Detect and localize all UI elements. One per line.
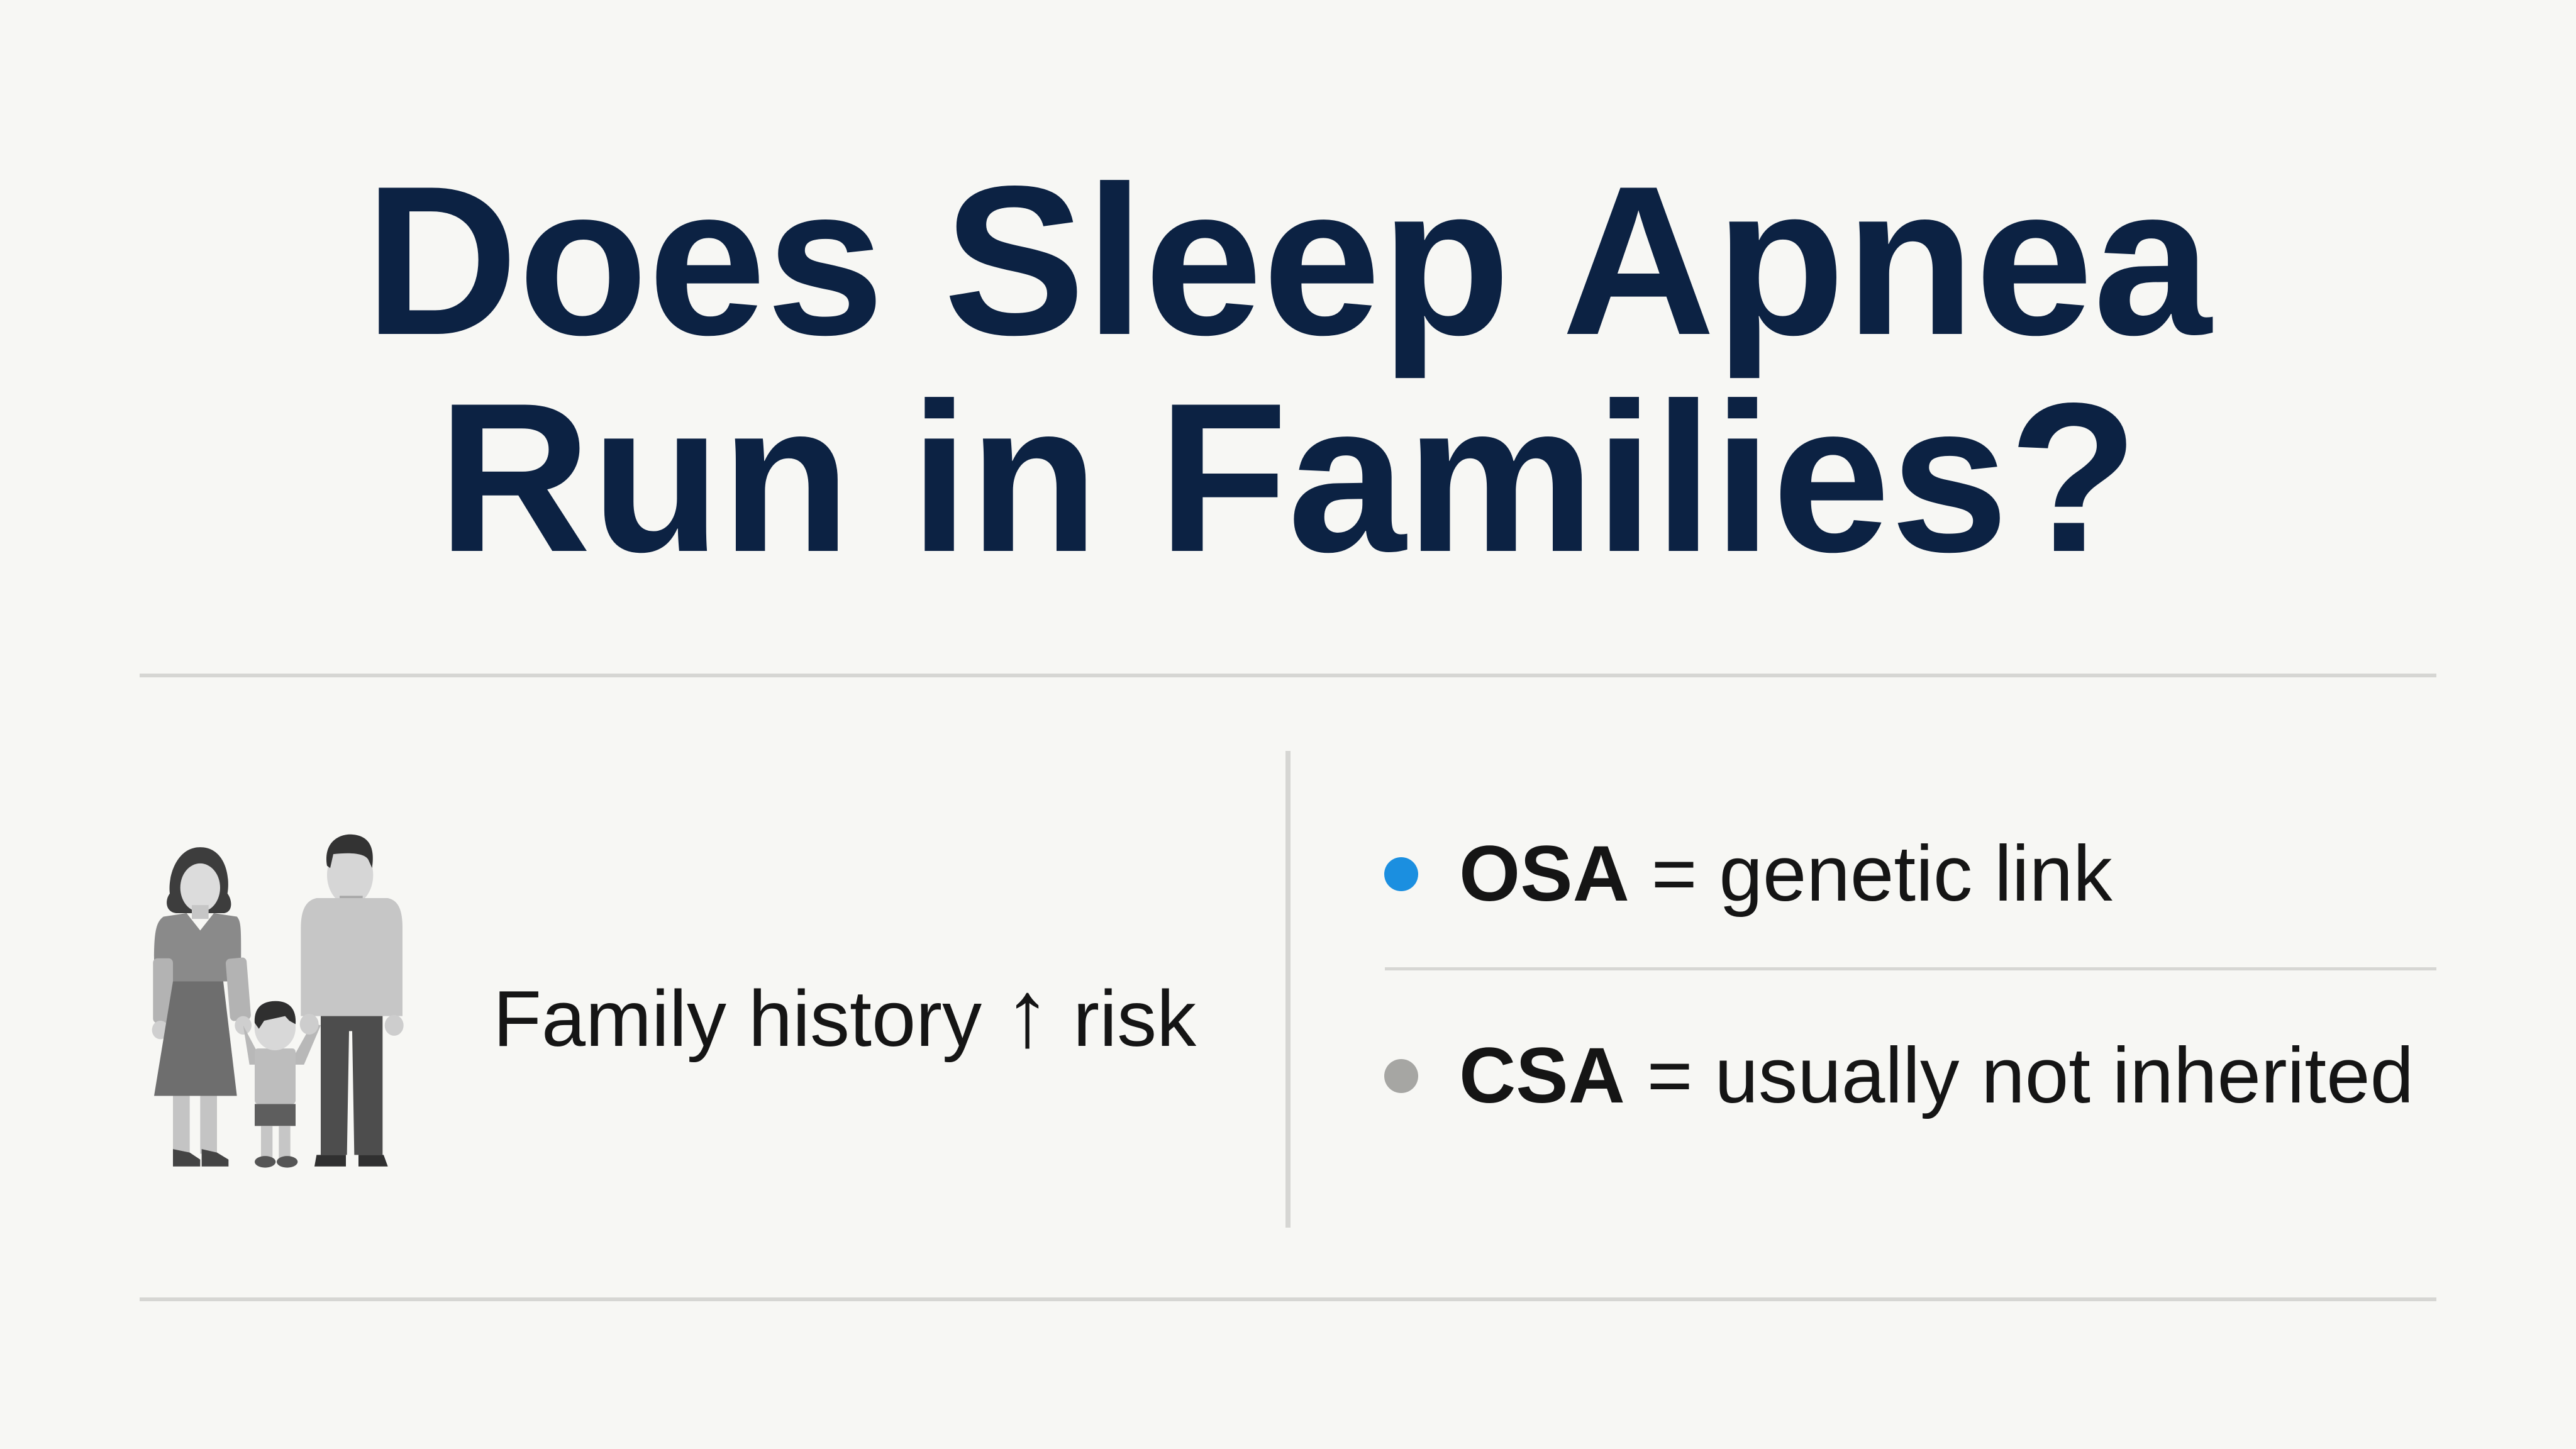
- row: CSA: [1384, 1032, 2414, 1119]
- man: [300, 835, 404, 1167]
- title: Run in Families?: [438, 358, 2138, 596]
- icon: blue dot: [1384, 857, 1418, 891]
- text: OSA: OSA = genetic link: [1459, 830, 2112, 918]
- child: [243, 1001, 321, 1168]
- row: OSA: [1384, 830, 2112, 918]
- title: Does Sleep Apnea: [365, 142, 2211, 379]
- icon: gray dot: [1384, 1059, 1418, 1093]
- text: family history: Family history ↑ risk: [493, 960, 1196, 1066]
- icon: family: [152, 834, 404, 1168]
- woman: [152, 847, 252, 1167]
- text: CSA: CSA = usually not inherited: [1459, 1032, 2414, 1119]
- title: [365, 142, 2212, 596]
